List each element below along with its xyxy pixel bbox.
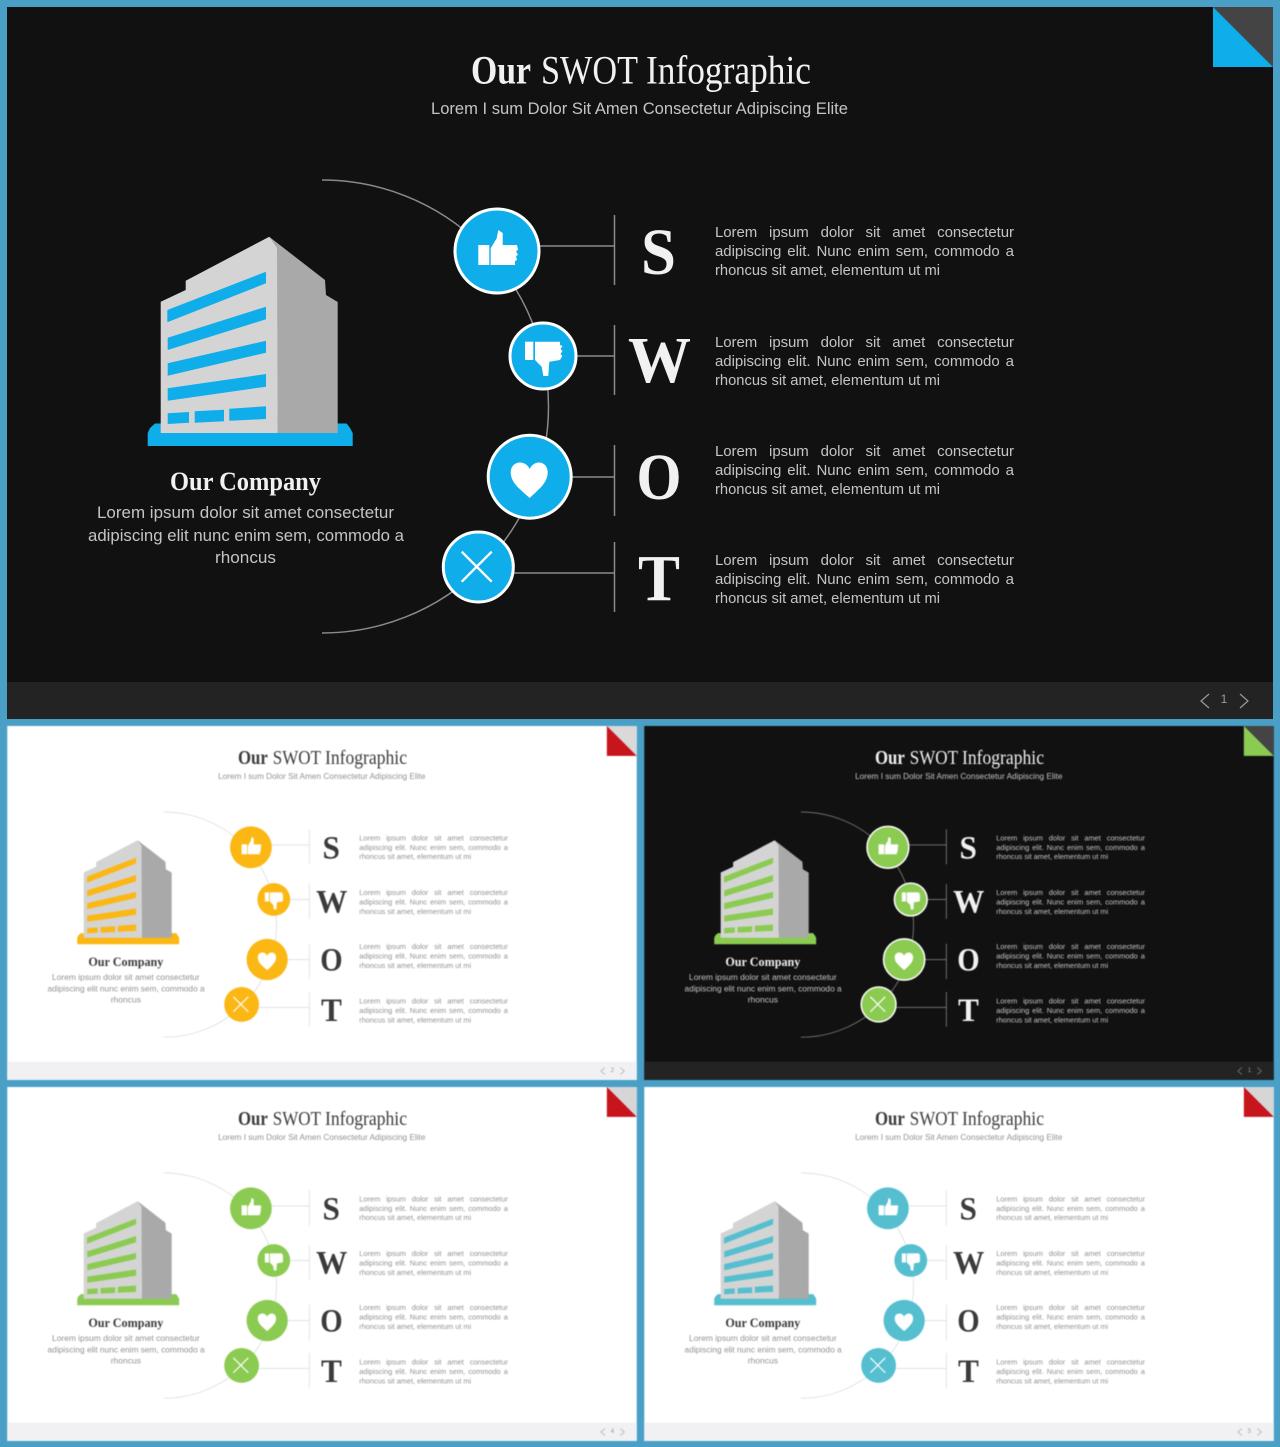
row W: rhoncus sit amet, elementum ut mi (359, 907, 471, 916)
company description: Lorem ipsum dolor sit amet consectetur (97, 503, 394, 522)
row S (867, 826, 1145, 868)
arc connector (800, 812, 913, 1037)
icon: heart (883, 1300, 924, 1341)
row T: Lorem ipsum dolor sit amet consectetur (715, 552, 1014, 569)
company name: Our Company (725, 954, 800, 969)
row T (861, 1348, 1145, 1390)
company name: Our Company (88, 1315, 164, 1330)
row S: S (322, 1192, 340, 1228)
icon: heart (247, 1300, 288, 1341)
row S: Lorem ipsum dolor sit amet consectetur (715, 224, 1014, 241)
row S (230, 1187, 509, 1229)
row T: adipiscing elit. Nunc enim sem, commodo a (996, 1367, 1145, 1376)
corner tab (1243, 1087, 1273, 1117)
icon: building (714, 840, 816, 944)
row S: Lorem ipsum dolor sit amet consectetur (359, 833, 508, 842)
title: SWOT (541, 48, 638, 92)
panel: main dark slide, blue (7, 7, 1273, 719)
row T: Lorem ipsum dolor sit amet consectetur (996, 1357, 1145, 1366)
row T: Lorem ipsum dolor sit amet consectetur (359, 1357, 508, 1366)
icon: thumbs down (894, 883, 927, 916)
row W: W (953, 1245, 984, 1281)
footer bar (7, 1423, 637, 1441)
icon: thumbs up (867, 826, 908, 868)
row O: rhoncus sit amet, elementum ut mi (996, 1322, 1108, 1331)
title (238, 1108, 407, 1130)
company description: rhoncus (215, 548, 276, 567)
row T: T (321, 1354, 342, 1390)
row S: rhoncus sit amet, elementum ut mi (359, 1213, 471, 1222)
title: SWOT (909, 747, 958, 769)
row W: Lorem ipsum dolor sit amet consectetur (996, 1249, 1145, 1258)
row S: Lorem ipsum dolor sit amet consectetur (996, 1194, 1145, 1203)
row S: Lorem ipsum dolor sit amet consectetur (996, 833, 1145, 842)
row W: rhoncus sit amet, elementum ut mi (359, 1268, 471, 1277)
row S (230, 826, 509, 868)
company description (48, 972, 205, 1004)
corner tab (607, 726, 637, 756)
company description: rhoncus (747, 994, 778, 1004)
row O (247, 1300, 509, 1341)
row W (894, 1244, 1145, 1281)
title: SWOT (273, 747, 321, 769)
row T: rhoncus sit amet, elementum ut mi (715, 590, 940, 607)
row O: O (320, 943, 343, 979)
row S: rhoncus sit amet, elementum ut mi (996, 1213, 1108, 1222)
title (238, 747, 407, 769)
row O: rhoncus sit amet, elementum ut mi (715, 481, 940, 498)
company name: Our Company (725, 1315, 800, 1330)
row W: Lorem ipsum dolor sit amet consectetur (715, 334, 1014, 351)
row O: Lorem ipsum dolor sit amet consectetur (359, 1303, 508, 1312)
row S: adipiscing elit. Nunc enim sem, commodo a (715, 243, 1015, 260)
row W: adipiscing elit. Nunc enim sem, commodo a (359, 1258, 509, 1267)
page number (1237, 1429, 1261, 1436)
row T: rhoncus sit amet, elementum ut mi (996, 1376, 1108, 1385)
row O: Lorem ipsum dolor sit amet consectetur (715, 443, 1014, 460)
row W: adipiscing elit. Nunc enim sem, commodo a (715, 353, 1015, 370)
company description: rhoncus (111, 994, 141, 1004)
row W (257, 883, 509, 920)
row O: Lorem ipsum dolor sit amet consectetur (359, 942, 508, 951)
company description: adipiscing elit nunc enim sem, commodo a (684, 1345, 841, 1355)
company description: adipiscing elit nunc enim sem, commodo a (88, 526, 405, 545)
title: Our (874, 747, 904, 769)
title: SWOT (909, 1108, 958, 1130)
page number (601, 1429, 624, 1436)
company description (684, 1333, 841, 1365)
row W: Lorem ipsum dolor sit amet consectetur (359, 888, 508, 897)
corner tab (1213, 7, 1273, 67)
row T: adipiscing elit. Nunc enim sem, commodo a (996, 1006, 1145, 1015)
title (874, 1108, 1044, 1130)
row W (257, 1244, 509, 1281)
row S: adipiscing elit. Nunc enim sem, commodo a (996, 1204, 1145, 1213)
row O: O (320, 1304, 343, 1340)
row T: T (321, 993, 342, 1029)
subtitle: Lorem I sum Dolor Sit Amen Consectetur Adipiscing Elite (218, 771, 426, 781)
page number: 4 (611, 1429, 615, 1435)
row S: S (322, 831, 340, 867)
icon: heart (488, 435, 571, 518)
page number: 2 (611, 1068, 615, 1074)
row W: rhoncus sit amet, elementum ut mi (715, 372, 940, 389)
title: SWOT (273, 1108, 321, 1130)
panel: small white slide, yellow (6, 725, 638, 1081)
row T: rhoncus sit amet, elementum ut mi (996, 1015, 1108, 1024)
row O: rhoncus sit amet, elementum ut mi (359, 961, 471, 970)
row O: O (957, 943, 979, 979)
icon: heart (247, 939, 288, 980)
icon: building (148, 237, 353, 446)
company description: Lorem ipsum dolor sit amet consectetur (689, 1333, 836, 1343)
arc connector (800, 1173, 913, 1398)
icon: thumbs up (867, 1187, 908, 1229)
title: Our (238, 1108, 268, 1130)
title (471, 48, 811, 92)
title: Infographic (961, 1108, 1044, 1130)
icon: building (714, 1201, 816, 1305)
row S: rhoncus sit amet, elementum ut mi (359, 852, 471, 861)
row O: rhoncus sit amet, elementum ut mi (996, 961, 1108, 970)
row T: Lorem ipsum dolor sit amet consectetur (359, 996, 508, 1005)
panel: small white slide, green (6, 1086, 638, 1442)
title: Infographic (325, 1108, 407, 1130)
row O: adipiscing elit. Nunc enim sem, commodo a (996, 1313, 1145, 1322)
footer bar (644, 1062, 1273, 1080)
row O (883, 939, 1145, 980)
icon: thumbs down (510, 323, 576, 389)
row T (861, 987, 1145, 1029)
icon: cross (861, 987, 896, 1022)
page number: 1 (1221, 692, 1228, 706)
row S (867, 1187, 1145, 1229)
row W: Lorem ipsum dolor sit amet consectetur (359, 1249, 508, 1258)
row S: rhoncus sit amet, elementum ut mi (996, 852, 1108, 861)
row O (247, 939, 509, 980)
row T: Lorem ipsum dolor sit amet consectetur (996, 996, 1145, 1005)
row S: rhoncus sit amet, elementum ut mi (715, 262, 940, 279)
row W: adipiscing elit. Nunc enim sem, commodo a (996, 1258, 1145, 1267)
row T: adipiscing elit. Nunc enim sem, commodo a (359, 1006, 509, 1015)
icon: thumbs up (230, 826, 272, 868)
title: Our (874, 1108, 904, 1130)
footer bar (7, 682, 1273, 719)
icon: cross (443, 532, 513, 602)
row O: Lorem ipsum dolor sit amet consectetur (996, 942, 1145, 951)
row W: W (316, 1245, 348, 1281)
page number: 5 (1247, 1429, 1251, 1435)
row T (224, 987, 509, 1029)
row S: adipiscing elit. Nunc enim sem, commodo a (996, 843, 1145, 852)
page number (601, 1068, 624, 1075)
row S: S (959, 1192, 976, 1228)
row S: adipiscing elit. Nunc enim sem, commodo a (359, 843, 509, 852)
icon: thumbs down (257, 883, 290, 916)
subtitle: Lorem I sum Dolor Sit Amen Consectetur Adipiscing Elite (855, 1132, 1062, 1142)
company description (48, 1333, 205, 1365)
panel: small white slide, teal (643, 1086, 1275, 1442)
row O: O (636, 441, 682, 514)
footer bar (644, 1423, 1273, 1441)
arc connector (164, 812, 277, 1037)
icon: cross (224, 1348, 259, 1383)
company name: Our Company (170, 467, 321, 496)
row T (443, 532, 1015, 615)
corner tab (607, 1087, 637, 1117)
row S: S (959, 831, 976, 867)
icon: heart (883, 939, 924, 980)
icon: thumbs down (894, 1244, 927, 1277)
row W: W (628, 324, 691, 397)
page number (1201, 692, 1248, 708)
row O: rhoncus sit amet, elementum ut mi (359, 1322, 471, 1331)
company name: Our Company (88, 954, 164, 969)
row O: adipiscing elit. Nunc enim sem, commodo a (359, 952, 509, 961)
company description: Lorem ipsum dolor sit amet consectetur (52, 972, 200, 982)
row W: Lorem ipsum dolor sit amet consectetur (996, 888, 1145, 897)
title: Infographic (646, 48, 811, 92)
icon: building (77, 840, 179, 944)
company description: adipiscing elit nunc enim sem, commodo a (48, 1345, 205, 1355)
title: Our (471, 48, 531, 92)
icon: thumbs down (257, 1244, 290, 1277)
row O (883, 1300, 1145, 1341)
row O: Lorem ipsum dolor sit amet consectetur (996, 1303, 1145, 1312)
icon: thumbs up (455, 209, 539, 293)
row W: W (953, 884, 984, 920)
title: Infographic (325, 747, 407, 769)
icon: cross (861, 1348, 896, 1383)
row T: rhoncus sit amet, elementum ut mi (359, 1015, 471, 1024)
row W: adipiscing elit. Nunc enim sem, commodo a (996, 897, 1145, 906)
title (874, 747, 1044, 769)
company description (684, 972, 841, 1004)
row W: adipiscing elit. Nunc enim sem, commodo a (359, 897, 509, 906)
company description: adipiscing elit nunc enim sem, commodo a (684, 984, 841, 994)
company description: Lorem ipsum dolor sit amet consectetur (689, 972, 836, 982)
arc connector (322, 180, 549, 633)
row O: adipiscing elit. Nunc enim sem, commodo a (996, 952, 1145, 961)
panel: small dark slide, green (643, 725, 1275, 1081)
row W: rhoncus sit amet, elementum ut mi (996, 907, 1108, 916)
company description: Lorem ipsum dolor sit amet consectetur (52, 1333, 200, 1343)
icon: thumbs up (230, 1187, 272, 1229)
company description: rhoncus (747, 1355, 778, 1365)
row O (488, 435, 1015, 518)
footer bar (7, 1062, 637, 1080)
row S (455, 209, 1015, 293)
page number (1237, 1068, 1261, 1075)
row O: O (957, 1304, 979, 1340)
row T: adipiscing elit. Nunc enim sem, commodo a (359, 1367, 509, 1376)
row T: adipiscing elit. Nunc enim sem, commodo a (715, 571, 1015, 588)
row O: adipiscing elit. Nunc enim sem, commodo a (715, 462, 1015, 479)
corner tab (1243, 726, 1273, 756)
row T: rhoncus sit amet, elementum ut mi (359, 1376, 471, 1385)
row T (224, 1348, 509, 1390)
row O: adipiscing elit. Nunc enim sem, commodo a (359, 1313, 509, 1322)
company description: adipiscing elit nunc enim sem, commodo a (48, 984, 205, 994)
row T: T (638, 542, 680, 615)
row W: rhoncus sit amet, elementum ut mi (996, 1268, 1108, 1277)
row T: T (958, 993, 978, 1029)
row T: T (958, 1354, 978, 1390)
arc connector (164, 1173, 277, 1398)
subtitle: Lorem I sum Dolor Sit Amen Consectetur Adipiscing Elite (855, 771, 1062, 781)
row S: S (641, 216, 676, 289)
row S: adipiscing elit. Nunc enim sem, commodo a (359, 1204, 509, 1213)
row W (894, 883, 1145, 920)
subtitle: Lorem I sum Dolor Sit Amen Consectetur Adipiscing Elite (218, 1132, 426, 1142)
page number: 1 (1247, 1068, 1251, 1074)
row W: W (316, 884, 348, 920)
row W (510, 323, 1015, 397)
icon: building (77, 1201, 179, 1305)
company description: rhoncus (111, 1355, 141, 1365)
row S: Lorem ipsum dolor sit amet consectetur (359, 1194, 508, 1203)
title: Our (238, 747, 268, 769)
company description (88, 503, 405, 567)
subtitle: Lorem I sum Dolor Sit Amen Consectetur Adipiscing Elite (431, 99, 848, 118)
title: Infographic (961, 747, 1044, 769)
icon: cross (224, 987, 259, 1022)
